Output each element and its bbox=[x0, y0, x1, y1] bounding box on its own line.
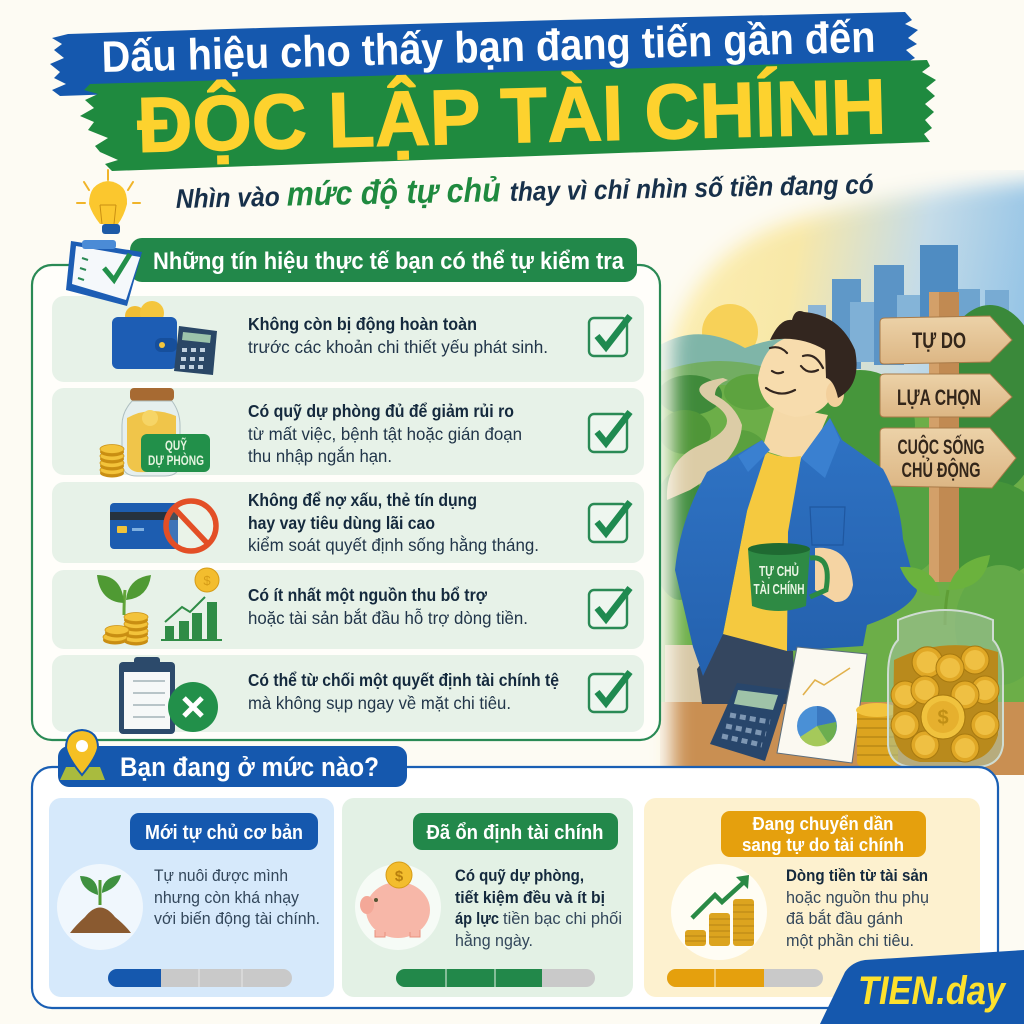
panel heading: which level: Bạn đang ở mức nào? bbox=[120, 752, 379, 782]
t-shirt bbox=[723, 449, 801, 651]
subtitle bbox=[175, 163, 874, 216]
icon: sprout on soil bbox=[57, 864, 143, 950]
pill heading: Mới tự chủ cơ bản bbox=[145, 822, 303, 844]
row 3 text: Không để nợ xấu, thẻ tín dụng bbox=[248, 490, 477, 510]
description: với biến động tài chính. bbox=[154, 909, 320, 928]
subtitle: mức độ tự chủ bbox=[286, 171, 501, 214]
illustration: man with coffee and signpost bbox=[640, 170, 1024, 775]
pill heading: sang tự do tài chính bbox=[742, 834, 904, 855]
icon: sprout with coins and growth chart: $ bbox=[203, 573, 211, 588]
row 1 background bbox=[52, 296, 644, 382]
description: hằng ngày. bbox=[455, 931, 533, 950]
panel: which level are you bbox=[32, 767, 998, 1008]
pill heading bbox=[413, 813, 618, 850]
jacket right bbox=[787, 418, 917, 651]
description: Có quỹ dự phòng, bbox=[455, 866, 584, 885]
title banner: green: ĐỘC LẬP TÀI CHÍNH bbox=[136, 62, 887, 169]
row 4 background bbox=[52, 570, 644, 649]
jacket left bbox=[675, 440, 766, 676]
row 1 text bbox=[248, 314, 548, 357]
pill heading bbox=[130, 813, 318, 850]
title banner: blue: Dấu hiệu cho thấy bạn đang tiến gần đến bbox=[101, 13, 876, 82]
row 3 text: hay vay tiêu dùng lãi cao bbox=[248, 513, 435, 533]
row 4 text bbox=[248, 585, 528, 628]
card: basic autonomy bbox=[49, 798, 334, 997]
description: Tự nuôi được mình bbox=[154, 866, 288, 885]
row 1 text: Không còn bị động hoàn toàn bbox=[248, 314, 477, 334]
coin stack bbox=[856, 703, 898, 766]
subtitle: thay vì chỉ nhìn số tiền đang có bbox=[509, 169, 874, 207]
sign: Lựa chọn bbox=[880, 374, 1012, 417]
description bbox=[786, 866, 929, 950]
row 4 text: hoặc tài sản bắt đầu hỗ trợ dòng tiền. bbox=[248, 607, 528, 628]
sign: Cuộc sống chủ động bbox=[880, 428, 1016, 488]
mug: TỰ CHỦ bbox=[759, 562, 799, 580]
card: moving to freedom bbox=[644, 798, 980, 997]
row 1 text: trước các khoản chi thiết yếu phát sinh. bbox=[248, 337, 548, 357]
notebook bbox=[777, 647, 867, 763]
row 5 background bbox=[52, 655, 644, 732]
row 4 text: Có ít nhất một nguồn thu bổ trợ bbox=[248, 585, 488, 605]
row 5 text bbox=[248, 670, 559, 713]
row 3 text: kiểm soát quyết định sống hằng tháng. bbox=[248, 534, 539, 555]
description bbox=[154, 866, 320, 928]
icon: wallet and calculator bbox=[112, 301, 217, 375]
description bbox=[455, 866, 622, 950]
mug: TÀI CHÍNH bbox=[754, 581, 804, 598]
checkboxes bbox=[589, 316, 630, 712]
mug bbox=[748, 543, 827, 611]
icon: coins and growth arrow bbox=[671, 864, 767, 960]
icon: map pin bbox=[60, 730, 105, 780]
neck bbox=[762, 405, 828, 462]
icon: emergency fund jar bbox=[100, 388, 210, 478]
sign: Tự do: TỰ DO bbox=[912, 328, 966, 353]
panel: real signals bbox=[32, 265, 660, 740]
sign: Cuộc sống chủ động: CHỦ ĐỘNG bbox=[902, 458, 980, 482]
description: nhưng còn khá nhạy bbox=[154, 888, 299, 907]
hand bbox=[815, 548, 853, 602]
panel heading: real signals: Những tín hiệu thực tế bạn có thể tự kiểm tra bbox=[153, 248, 625, 275]
man bbox=[675, 311, 917, 704]
collar bbox=[738, 418, 840, 478]
row 5 text: Có thể từ chối một quyết định tài chính tệ bbox=[248, 670, 559, 690]
pill heading: Đã ổn định tài chính bbox=[426, 822, 604, 844]
description: một phần chi tiêu. bbox=[786, 931, 914, 950]
pill heading: Đang chuyển dần bbox=[752, 813, 894, 834]
card: financially stable bbox=[342, 798, 633, 997]
description: áp lực bbox=[455, 909, 499, 928]
icon: piggy bank bbox=[355, 862, 441, 950]
description: tiết kiệm đều và ít bị bbox=[455, 888, 605, 907]
panel heading: real signals bbox=[130, 238, 637, 282]
progress bar bbox=[667, 969, 823, 987]
winding path bbox=[667, 378, 742, 500]
hills and greenery bbox=[650, 305, 1024, 715]
row 2 text bbox=[248, 401, 522, 466]
ear bbox=[826, 381, 844, 407]
progress bar bbox=[108, 969, 292, 987]
progress bar bbox=[396, 969, 595, 987]
description: tiền bạc chi phối bbox=[503, 909, 622, 928]
sign: Cuộc sống chủ động: CUỘC SỐNG bbox=[898, 435, 984, 459]
row 5 text: mà không sụp ngay về mặt chi tiêu. bbox=[248, 693, 511, 713]
head bbox=[758, 335, 835, 417]
icon: emergency fund jar: QUỸ bbox=[165, 436, 187, 453]
icon: lightbulb bbox=[77, 170, 140, 234]
pill heading bbox=[721, 811, 926, 857]
description: hoặc nguồn thu phụ bbox=[786, 888, 929, 907]
hair bbox=[770, 311, 857, 398]
sun bbox=[702, 304, 758, 348]
description: đã bắt đầu gánh bbox=[786, 909, 903, 928]
icon: emergency fund jar: DỰ PHÒNG bbox=[148, 451, 204, 468]
description: Dòng tiền từ tài sản bbox=[786, 866, 928, 885]
pocket bbox=[810, 507, 845, 545]
row 2 text: thu nhập ngắn hạn. bbox=[248, 445, 392, 466]
sign: Lựa chọn: LỰA CHỌN bbox=[897, 385, 981, 410]
icon: credit card with prohibition sign bbox=[110, 501, 216, 551]
icon: sprout with coins and growth chart bbox=[97, 568, 222, 646]
panel heading: which level bbox=[58, 746, 407, 787]
logo: TIEN.day bbox=[820, 950, 1024, 1024]
row 3 background bbox=[52, 482, 644, 563]
wooden table bbox=[660, 702, 1024, 775]
sign: Tự do bbox=[880, 316, 1012, 364]
icon: piggy bank: $ bbox=[395, 868, 404, 885]
calculator bbox=[710, 683, 788, 761]
trousers bbox=[697, 634, 795, 704]
icon: checklist clipboard bbox=[66, 240, 142, 306]
row 2 text: Có quỹ dự phòng đủ để giảm rủi ro bbox=[248, 401, 514, 421]
subtitle: Nhìn vào bbox=[175, 182, 280, 214]
glass jar with sprout bbox=[888, 555, 1003, 767]
city skyline bbox=[808, 245, 1009, 369]
row 2 text: từ mất việc, bệnh tật hoặc gián đoạn bbox=[248, 424, 522, 444]
row 3 text bbox=[248, 490, 539, 555]
row 2 background bbox=[52, 388, 644, 475]
glass jar with sprout: $ bbox=[937, 707, 949, 729]
icon: clipboard with X bbox=[119, 657, 218, 734]
face features bbox=[766, 347, 823, 394]
signpost bbox=[880, 292, 1016, 582]
